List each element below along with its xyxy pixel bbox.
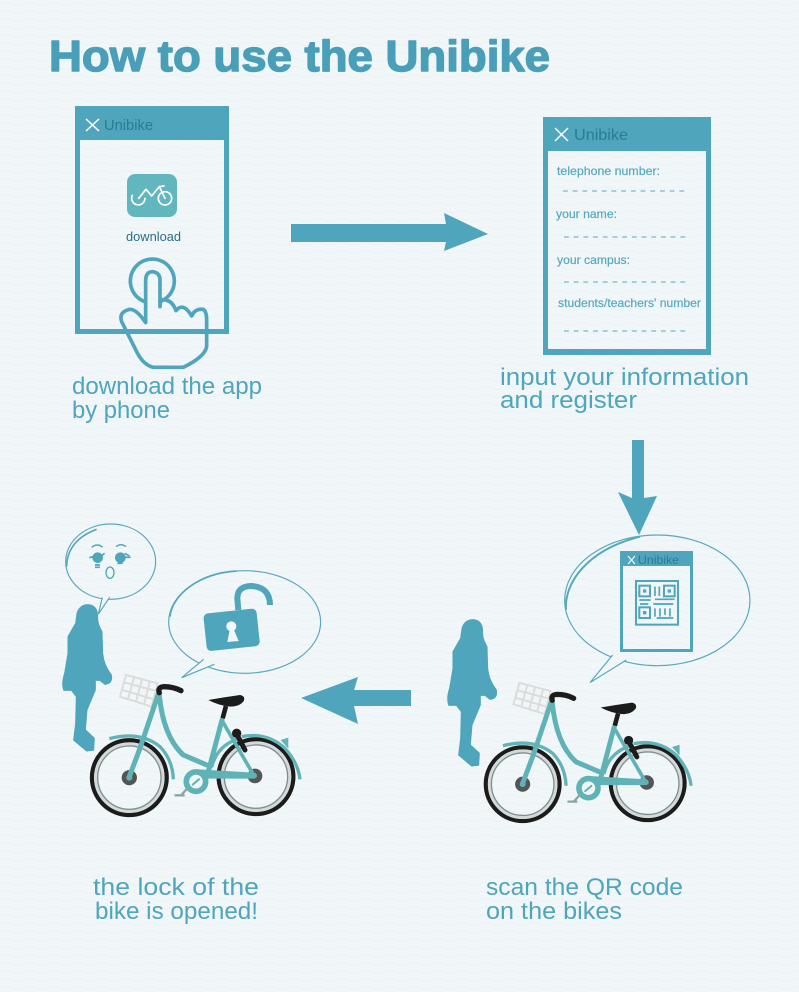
arrow: step 2 to step 3 — [618, 440, 657, 535]
panel: step 2 register window — [543, 117, 711, 355]
panel: step 1 download window — [75, 106, 229, 367]
panel: step 3 QR window — [620, 551, 693, 652]
window title: Unibike — [104, 117, 153, 134]
fenders — [109, 735, 300, 779]
basket — [120, 675, 158, 707]
title: How to use the Unibike — [49, 32, 550, 81]
form fields: telephone number: — [557, 164, 660, 178]
saddle and handlebar — [601, 703, 636, 714]
wheels — [92, 739, 293, 815]
caption: step 4: bike is opened! — [95, 898, 258, 925]
caption: step 3: on the bikes — [486, 898, 622, 925]
window title: Unibike — [574, 127, 628, 144]
bicycle left — [92, 675, 300, 815]
window frame — [620, 551, 693, 652]
speech bubble: surprised face — [66, 524, 156, 614]
wheels — [486, 746, 685, 821]
icon: tapping hand — [121, 259, 207, 367]
caption: step 3 — [486, 874, 683, 925]
form fields: your campus: — [557, 253, 630, 267]
figure: woman left — [63, 605, 111, 751]
window frame — [75, 106, 229, 334]
arrow: step 1 to step 2 — [291, 213, 488, 251]
icon: QR code — [636, 581, 678, 625]
frame — [523, 702, 646, 798]
caption: step 2 — [500, 364, 749, 414]
close icon — [628, 556, 635, 564]
window title: Unibike — [638, 553, 679, 567]
window frame — [543, 117, 711, 355]
basket — [513, 683, 551, 714]
caption: step 1 — [72, 373, 262, 424]
form fields: students/teachers' number — [558, 296, 701, 310]
saddle and handlebar — [208, 695, 244, 707]
close icon — [555, 128, 568, 141]
frame — [129, 694, 254, 791]
caption: step 4: the lock of the — [93, 874, 259, 901]
download label: download — [126, 230, 181, 244]
icon: app bike — [127, 174, 177, 217]
caption: step 4 — [93, 874, 259, 925]
bicycle right — [486, 683, 691, 821]
caption: step 2: input your information — [500, 364, 749, 391]
caption: step 3: scan the QR code — [486, 874, 683, 901]
figure: woman right — [448, 620, 496, 766]
icon: surprised face — [89, 545, 131, 578]
arrow: step 3 to step 4 — [301, 677, 411, 724]
caption: step 1: by phone — [72, 397, 170, 424]
caption: step 2: and register — [500, 387, 637, 414]
form fields: your name: — [556, 207, 617, 221]
speech bubble: QR code — [565, 535, 750, 683]
speech bubble: open lock — [169, 571, 321, 678]
fenders — [503, 743, 691, 786]
close icon — [86, 119, 99, 131]
form fields — [556, 164, 701, 331]
icon: open padlock — [203, 586, 270, 651]
caption: step 1: download the app — [72, 373, 262, 400]
